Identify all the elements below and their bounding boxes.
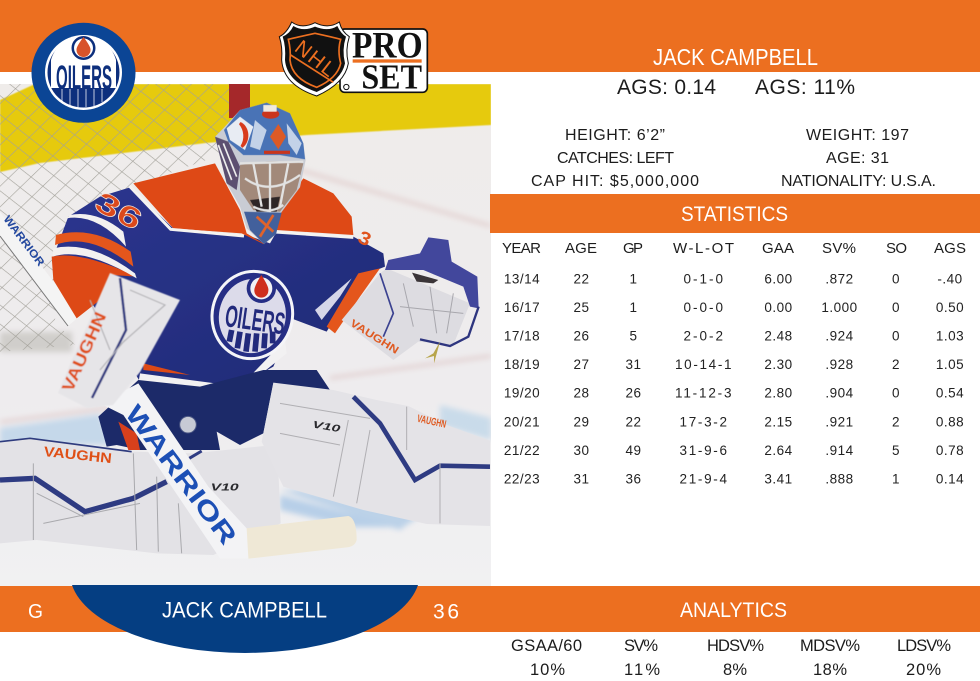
table header: SO [886, 240, 907, 257]
row 22/23 [504, 471, 964, 486]
analytics values: 18% [813, 661, 847, 679]
table header: AGE [565, 240, 597, 257]
orange yoke [133, 163, 353, 244]
bio left column: HEIGHT: 6’2” [565, 127, 665, 144]
row 13/14: 0 [892, 272, 900, 286]
blocker [58, 273, 180, 408]
row 17/18: 2-0-2 [684, 328, 724, 344]
Pro Set plaque: SET [361, 57, 422, 96]
lower stick blade [246, 516, 357, 559]
row 18/19: 2.30 [764, 357, 793, 372]
table header: W-L-OT [673, 240, 734, 257]
right leg pad: V10 [311, 419, 342, 435]
row 18/19: 27 [573, 357, 590, 372]
row 16/17: 1 [629, 300, 638, 315]
bio right column [781, 127, 936, 190]
row 17/18: 17/18 [504, 328, 540, 344]
row 22/23: .888 [825, 471, 854, 486]
table header [502, 240, 966, 257]
footer player name: JACK CAMPBELL [162, 598, 327, 622]
team logo: Oilers roundel [32, 23, 136, 123]
row 13/14: -.40 [937, 272, 963, 286]
row 20/21: 17-3-2 [680, 414, 728, 429]
AGS summary: AGS: 11% [755, 76, 855, 99]
row 16/17: 16/17 [504, 300, 540, 315]
bio left column: CATCHES: LEFT [557, 150, 674, 167]
catching glove: VAUGHN [348, 317, 401, 357]
left sleeve stripes [52, 214, 137, 318]
row 18/19: .928 [825, 357, 854, 372]
right leg pad: VAUGHN [416, 413, 447, 431]
navy pants [98, 370, 330, 450]
row 21/22: 21/22 [504, 443, 540, 458]
row 21/22: 5 [892, 443, 900, 458]
row 16/17: 0-0-0 [684, 300, 724, 315]
jersey number: 36 [433, 600, 459, 624]
row 17/18: 1.03 [936, 328, 964, 344]
chest logo: OILERS [223, 299, 287, 341]
row 18/19: 10-14-1 [675, 357, 732, 372]
chest logo [210, 270, 294, 360]
header player name: JACK CAMPBELL [653, 44, 818, 70]
row 21/22: 49 [625, 443, 642, 458]
team logo: Oilers roundel: OILERS [56, 59, 112, 97]
goalie mask [215, 103, 306, 244]
row 19/20: 26 [625, 386, 642, 401]
goalie figure, upper body [52, 103, 479, 388]
white strip above photo [0, 72, 490, 84]
row 13/14: 0-1-0 [684, 272, 724, 286]
white jersey piping [129, 186, 353, 237]
orange sock [118, 422, 140, 450]
row 17/18: .924 [825, 328, 854, 344]
table header: AGS [934, 240, 966, 257]
right leg pad [262, 383, 490, 526]
rink lines and blue crease [0, 170, 491, 530]
row 18/19: 31 [625, 357, 642, 372]
row 18/19: 2 [892, 357, 900, 372]
goal net [0, 84, 229, 354]
row 17/18 [504, 328, 964, 344]
row 19/20: .904 [825, 386, 854, 401]
row 13/14: 22 [573, 272, 590, 286]
AGS summary [617, 76, 855, 99]
row 20/21: 29 [573, 414, 590, 429]
bio left column: CAP HIT: $5,000,000 [531, 173, 699, 190]
row 19/20: 28 [573, 386, 590, 401]
left leg pad [0, 438, 281, 555]
upper stick shaft [0, 213, 68, 326]
row 13/14: 1 [629, 272, 638, 286]
blocker: VAUGHN [58, 309, 110, 395]
row 20/21: 0.88 [936, 414, 964, 429]
row 19/20: 0 [892, 386, 900, 401]
row 18/19: 18/19 [504, 357, 540, 372]
sleeve number 36: 36 [89, 185, 148, 237]
analytics values: 11% [624, 661, 660, 679]
row 19/20: 19/20 [504, 386, 540, 401]
row 13/14: 13/14 [504, 272, 540, 286]
row 22/23: 1 [892, 471, 900, 486]
analytics heading: ANALYTICS [680, 599, 787, 622]
row 16/17: 0 [892, 300, 900, 315]
shoulder-crest patch [180, 416, 196, 433]
row 22/23: 22/23 [504, 471, 540, 486]
row 21/22: 0.78 [936, 443, 964, 458]
row 13/14 [504, 272, 963, 286]
NHL shield: NHL [290, 36, 340, 82]
analytics labels: LDSV% [897, 637, 951, 655]
table header: YEAR [502, 240, 541, 257]
blue name arc [72, 585, 418, 653]
analytics values: 10% [530, 661, 565, 679]
right sleeve stripes [315, 268, 380, 333]
row 21/22 [504, 443, 964, 458]
row 20/21: 20/21 [504, 414, 540, 429]
Pro Set plaque [340, 24, 427, 96]
row 17/18: 2.48 [764, 328, 793, 344]
analytics labels [511, 637, 951, 655]
row 22/23: 3.41 [764, 471, 793, 486]
row 13/14: .872 [825, 272, 854, 286]
statistics table [502, 240, 966, 486]
jersey hem stripes [139, 344, 284, 384]
analytics values: 20% [906, 661, 941, 679]
bio right column: NATIONALITY: U.S.A. [781, 173, 936, 190]
analytics labels: HDSV% [707, 637, 764, 655]
statistics band [490, 194, 980, 233]
left leg pad: VAUGHN [43, 443, 113, 466]
row 20/21: .921 [825, 414, 854, 429]
row 20/21 [504, 414, 964, 429]
statistics band: STATISTICS [681, 203, 788, 226]
row 18/19: 1.05 [936, 357, 964, 372]
right sleeve number: 3 [355, 226, 375, 250]
row 16/17: 0.50 [936, 300, 964, 315]
row 16/17: 1.000 [821, 300, 858, 315]
NHL shield [279, 22, 349, 96]
row 19/20: 0.54 [936, 386, 964, 401]
row 21/22: 30 [573, 443, 590, 458]
row 18/19 [504, 357, 964, 372]
Pro Set plaque: PRO [352, 24, 423, 65]
row 21/22: 31-9-6 [680, 443, 728, 458]
row 21/22: 2.64 [764, 443, 793, 458]
analytics labels: MDSV% [800, 637, 860, 655]
row 17/18: 26 [573, 328, 590, 344]
row 20/21: 22 [625, 414, 642, 429]
row 19/20: 11-12-3 [675, 386, 732, 401]
AGS summary: AGS: 0.14 [617, 76, 716, 99]
lower stick shaft [100, 383, 248, 558]
row 20/21: 2.15 [764, 414, 793, 429]
row 16/17: 0.00 [764, 300, 793, 315]
bio right column: WEIGHT: 197 [806, 127, 909, 144]
bio left column [531, 127, 699, 190]
left leg pad: V10 [211, 483, 239, 494]
top orange band [0, 0, 980, 72]
stick brand: WARRIOR [119, 400, 242, 550]
NHL Pro Set logo [279, 22, 427, 96]
goalie figure, lower body [0, 370, 490, 559]
row 21/22: .914 [825, 443, 854, 458]
row 19/20 [504, 386, 964, 401]
row 22/23: 0.14 [936, 471, 964, 486]
analytics values: 8% [723, 661, 747, 679]
table header: SV% [822, 240, 856, 257]
upper stick shaft: WARRIOR [1, 214, 46, 269]
row 22/23: 21-9-4 [680, 471, 728, 486]
row 17/18: 5 [629, 328, 638, 344]
jersey body [53, 187, 385, 385]
table header: GP [623, 240, 643, 257]
analytics values [530, 661, 941, 679]
bio right column: AGE: 31 [826, 150, 889, 167]
row 22/23: 36 [625, 471, 642, 486]
row 13/14: 6.00 [764, 272, 793, 286]
player photo: goalie making a save [0, 84, 491, 586]
row 17/18: 0 [892, 328, 900, 344]
table header: GAA [762, 240, 794, 257]
row 22/23: 31 [573, 471, 590, 486]
row 20/21: 2 [892, 414, 900, 429]
analytics labels: SV% [624, 637, 658, 655]
rink ice background [0, 84, 491, 586]
red goal post [229, 84, 250, 118]
catching glove [342, 237, 479, 363]
row 16/17: 25 [573, 300, 590, 315]
bottom orange band [0, 586, 980, 632]
position label: G [28, 601, 43, 623]
analytics labels: GSAA/60 [511, 637, 582, 655]
yellow arena boards [0, 84, 491, 172]
row 16/17 [504, 300, 964, 315]
row 19/20: 2.80 [764, 386, 793, 401]
